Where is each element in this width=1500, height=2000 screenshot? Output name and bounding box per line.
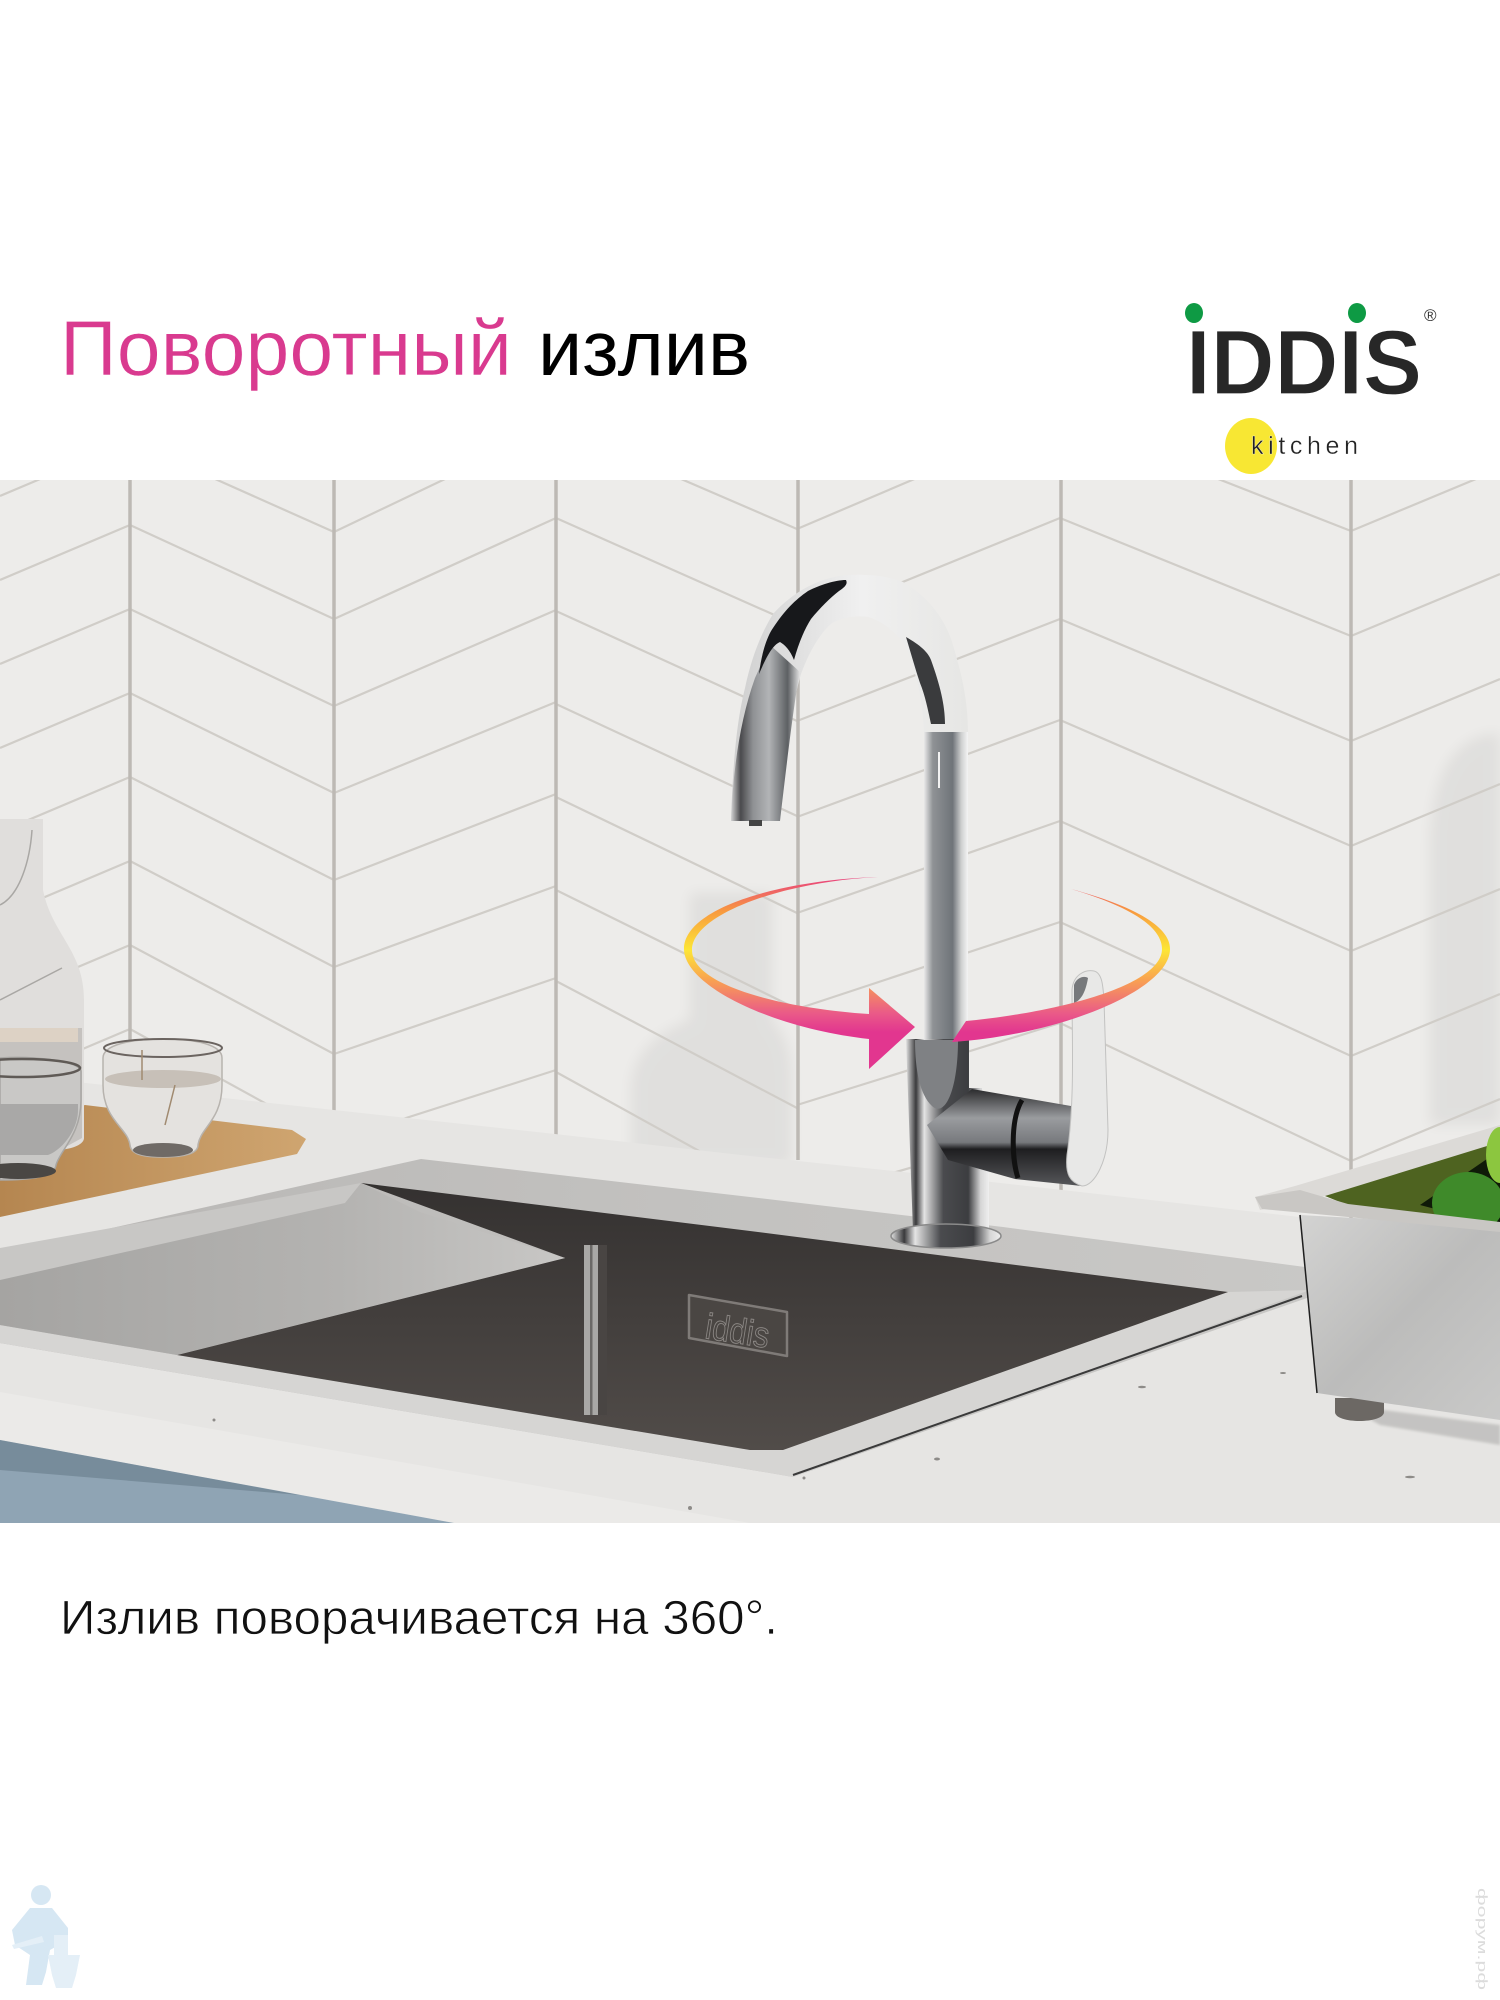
faucet inner bend reflection [906, 637, 945, 724]
cabinet [0, 1440, 454, 1523]
sink outer edge line [793, 1296, 1302, 1475]
box front [1300, 1215, 1500, 1420]
logo yellow circle [1225, 418, 1277, 474]
caption: Излив поворачивается на 360°. [60, 1592, 778, 1645]
toilet tank [54, 1935, 68, 1955]
logo registered mark: ® [1424, 306, 1437, 325]
logo wordmark: IDDIS [1186, 312, 1422, 414]
sink left wall reflection [0, 1183, 565, 1355]
watermark: plumber figure [12, 1885, 80, 1988]
title: Поворотный [60, 304, 512, 392]
plumber head [31, 1885, 51, 1905]
logo green dots [1185, 303, 1366, 323]
wooden tray [0, 1105, 306, 1217]
plumber wrench [12, 1936, 44, 1949]
box front rim [1255, 1190, 1500, 1232]
small glass front [0, 1058, 81, 1180]
box back rim [1255, 1125, 1500, 1210]
logo: IDDIS kitchen [1185, 303, 1437, 474]
rotation arrow [684, 877, 1170, 1069]
sink basin dark [177, 1183, 1228, 1450]
box lime [1486, 1127, 1500, 1183]
countertop front edge [0, 1392, 750, 1523]
faucet lower spout shading [731, 645, 800, 821]
faucet base disc [891, 1224, 1001, 1248]
box shadow [1370, 1409, 1500, 1446]
countertop [0, 1074, 1500, 1523]
rotation arrow left with head [684, 877, 915, 1069]
faucet pillar [924, 732, 968, 1042]
sink embossed logo: iddis [703, 1305, 772, 1356]
faucet aerator [749, 820, 762, 826]
faucet spout [731, 582, 957, 818]
wall [0, 480, 1500, 1280]
small glass back [103, 1039, 222, 1157]
sink rim [0, 1159, 1330, 1477]
watermark: vertical text: форум.рф [1475, 1888, 1490, 1990]
title: излив [538, 304, 750, 392]
faucet handle [1067, 971, 1108, 1186]
plumber torso and legs [12, 1908, 68, 1985]
tile pattern [0, 480, 1500, 1172]
faucet body [906, 1039, 989, 1232]
faucet lever cylinder [927, 1089, 1082, 1186]
faucet tick highlight [938, 752, 940, 788]
wall shadows [631, 733, 1500, 1165]
faucet dark reflection [759, 580, 847, 674]
toilet bowl [48, 1955, 80, 1988]
dish rack box [1255, 1125, 1500, 1445]
title [60, 304, 750, 392]
faucet lever collar [1013, 1100, 1022, 1178]
box foot [1335, 1398, 1384, 1421]
sink front rim highlight [0, 1290, 1310, 1477]
sink basin seam [584, 1245, 607, 1415]
box cucumber [1432, 1172, 1500, 1234]
carafe [0, 819, 84, 1150]
box interior [1325, 1142, 1500, 1226]
sink embossed logo [689, 1295, 787, 1356]
countertop speckles [212, 1372, 1415, 1510]
product photo panel [0, 417, 1500, 1523]
rotation arrow right [952, 889, 1170, 1042]
logo subline: kitchen [1251, 432, 1358, 460]
faucet [731, 575, 1108, 1248]
